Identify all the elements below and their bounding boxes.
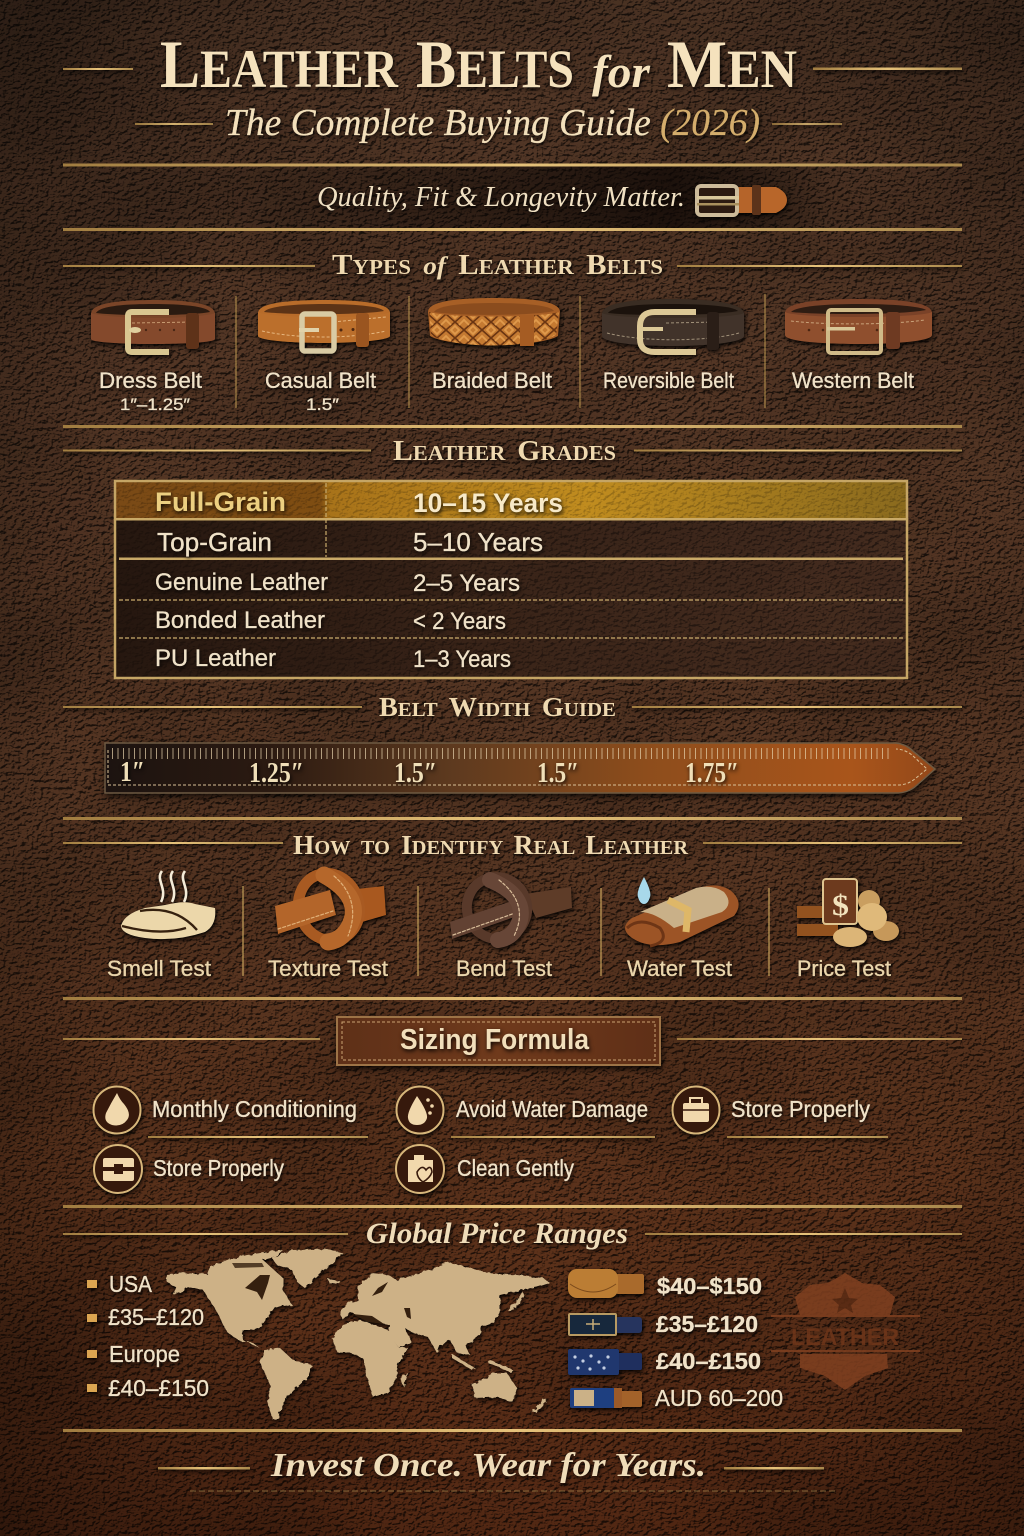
tip: clean gently: Clean Gently: [457, 1155, 574, 1181]
subtitle: The Complete Buying Guide (2026): [225, 102, 760, 144]
table: leather grades: [115, 481, 907, 678]
regional price list: USA: [109, 1271, 153, 1297]
dividers: [236, 294, 765, 408]
divider line: [63, 425, 962, 428]
divider line: [63, 997, 962, 1000]
divider line: [63, 1429, 962, 1432]
heading: sizing formula plaque: Sizing Formula: [400, 1024, 590, 1056]
belt labels: Western Belt: [792, 368, 914, 393]
test labels: Price Test: [797, 956, 891, 981]
heading: types of leather belts: TYPES of LEATHER BELTS: [332, 250, 663, 281]
tagline band: [63, 164, 962, 231]
icon: navy buckle: [569, 1314, 642, 1335]
price labels: [655, 1273, 783, 1411]
width labels: 1.25″: [249, 757, 304, 789]
width labels: [120, 756, 739, 789]
row: genuine leather: Genuine Leather: [155, 569, 328, 596]
tip: store properly (briefcase): Store Properly: [731, 1096, 870, 1122]
belt types row: [91, 294, 932, 414]
row: bonded leather: Bonded Leather: [155, 607, 325, 634]
identification tests row: [107, 865, 899, 981]
width labels: 1″: [120, 756, 145, 788]
divider line: [63, 817, 962, 820]
heading: sizing formula plaque: [63, 1017, 962, 1065]
heading: belt width guide: BELT WIDTH GUIDE: [379, 692, 616, 722]
tagline band: Quality, Fit & Longevity Matter.: [317, 182, 685, 213]
row: bonded leather: < 2 Years: [413, 608, 506, 635]
tip: clean gently: [396, 1145, 574, 1193]
icon: water test: [625, 877, 739, 946]
width labels: 1.5″: [537, 757, 579, 789]
tip: monthly conditioning: [94, 1086, 368, 1138]
belt labels: [99, 368, 914, 414]
tip: store properly (belt): Store Properly: [153, 1155, 284, 1181]
belt labels: Casual Belt: [265, 368, 376, 393]
width labels: 1.5″: [394, 757, 437, 789]
title: BELTS: [416, 26, 574, 102]
icon: casual belt: [258, 300, 390, 351]
regional price list: £35–£120: [108, 1304, 204, 1330]
icon: price test: [797, 879, 899, 947]
tip: avoid water damage: [396, 1086, 655, 1138]
title: LEATHER: [160, 26, 399, 102]
leather stamp: [771, 1273, 920, 1390]
title: [63, 26, 962, 102]
test labels: Texture Test: [268, 956, 388, 981]
regional price list: [87, 1271, 209, 1401]
icon: smell test: [121, 871, 215, 939]
title: for: [592, 46, 651, 97]
row: top-grain: 5–10 Years: [413, 527, 543, 557]
icon: western belt: [785, 299, 932, 353]
row: top-grain: Top-Grain: [157, 527, 272, 557]
icon: belt buckle: [697, 185, 787, 215]
tip: avoid water damage: Avoid Water Damage: [456, 1096, 648, 1122]
row: pu leather: [155, 645, 511, 673]
width labels: 1.75″: [685, 757, 739, 789]
icon: price test: $: [832, 889, 849, 922]
row: genuine leather: 2–5 Years: [413, 570, 520, 597]
test labels: Smell Test: [107, 956, 211, 981]
heading: global price ranges: Global Price Ranges: [366, 1217, 628, 1250]
belt labels: 1.5″: [306, 395, 339, 414]
row: genuine leather: [155, 569, 520, 597]
tip: store properly (belt): [94, 1145, 284, 1193]
row: full-grain: [155, 487, 563, 518]
test labels: [107, 956, 891, 981]
title: MEN: [667, 26, 797, 102]
belt labels: Dress Belt: [99, 368, 202, 393]
row: bonded leather: [155, 607, 506, 635]
price labels: AUD 60–200: [655, 1385, 783, 1411]
belt labels: Reversible Belt: [603, 368, 734, 393]
test labels: Bend Test: [456, 956, 552, 981]
icon: tan buckle: [568, 1269, 644, 1298]
icon: braided belt: [428, 298, 560, 346]
belt labels: 1″–1.25″: [120, 395, 190, 414]
row: pu leather: PU Leather: [155, 645, 276, 672]
heading: how to identify real leather: HOW TO IDENTIFY REAL LEATHER: [293, 830, 689, 860]
test labels: Water Test: [627, 956, 732, 981]
row: top-grain: [157, 527, 543, 557]
row: pu leather: 1–3 Years: [413, 646, 511, 673]
row: full-grain: Full-Grain: [155, 487, 286, 517]
belt width ruler: [105, 743, 935, 793]
icon: dress belt: [91, 300, 215, 352]
price labels: £40–£150: [656, 1348, 761, 1374]
heading: leather grades: LEATHER GRADES: [393, 436, 616, 467]
icon: texture test: [275, 865, 386, 949]
row: full-grain: 10–15 Years: [413, 488, 563, 518]
divider line: [63, 1205, 962, 1208]
regional price list: Europe: [109, 1341, 180, 1367]
dividers: [243, 886, 769, 976]
regional price list: £40–£150: [108, 1375, 209, 1401]
tip: monthly conditioning: Monthly Conditioning: [152, 1096, 357, 1122]
icon: blue patterned buckle: [568, 1349, 642, 1375]
belt labels: Braided Belt: [432, 368, 552, 393]
care tips: [94, 1086, 888, 1193]
world map: [167, 1249, 550, 1420]
price labels: £35–£120: [656, 1311, 758, 1337]
leather stamp: LEATHER: [791, 1324, 899, 1351]
footer tagline: Invest Once. Wear for Years.: [270, 1447, 706, 1484]
icon: reversible belt: [602, 299, 744, 352]
price labels: $40–$150: [657, 1273, 762, 1299]
tip: store properly (briefcase): [672, 1086, 888, 1138]
icon: decorated buckle: [570, 1388, 642, 1408]
icon: bend test: [450, 869, 572, 947]
price list with buckle icons: [568, 1269, 783, 1411]
